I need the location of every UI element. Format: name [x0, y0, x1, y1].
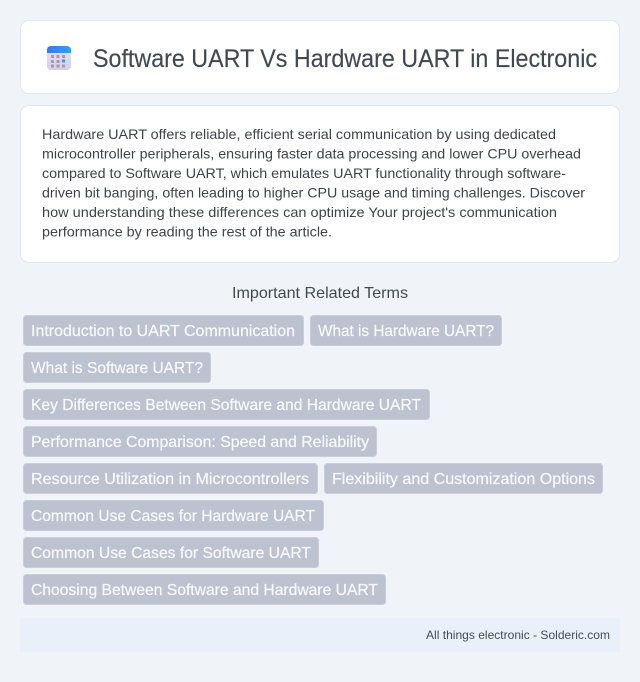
panel: summary paragraph: Hardware UART offers reliable, efficient serial communication by using dedicated: [42, 126, 556, 142]
chip: key differences: Key Differences Between Software and Hardware UART: [31, 397, 421, 414]
panel: summary paragraph: compared to Software UART, which emulates UART functionality through software-: [42, 165, 566, 181]
chip: introduction: Introduction to UART Communication: [31, 323, 295, 340]
chip: what is software uart: [24, 352, 210, 382]
title: Software UART Vs Hardware UART in Electronic: [93, 45, 597, 73]
chip: choosing between: [24, 574, 386, 604]
panel: summary paragraph: microcontroller peripherals, ensuring faster data processing and lower CPU overhead: [42, 146, 581, 162]
chip: use cases software: [24, 538, 318, 568]
chip: what is software uart: What is Software UART?: [31, 360, 203, 377]
chip: what is hardware uart: What is Hardware UART?: [318, 323, 494, 340]
chip: performance comparison: [24, 426, 376, 456]
panel: summary paragraph: [20, 106, 620, 262]
heading: important related terms: Important Related Terms: [232, 285, 408, 302]
footer: All things electronic - Solderic.com: [426, 628, 610, 642]
icon: calendar grid: [47, 46, 71, 70]
panel: summary paragraph: performance by reading the rest of the article.: [42, 224, 332, 240]
chip: use cases hardware: [24, 500, 324, 530]
chip: resource utilization: [24, 464, 318, 494]
chip: key differences: [24, 390, 430, 420]
panel: summary paragraph: driven bit banging, often leading to higher CPU usage and timing challenges. Discover: [42, 184, 585, 200]
chip: choosing between: Choosing Between Software and Hardware UART: [31, 582, 378, 599]
chip: resource utilization: Resource Utilization in Microcontrollers: [31, 471, 309, 488]
panel: related term chips: [24, 316, 602, 604]
panel: summary paragraph: how understanding these differences can optimize Your project's communication: [42, 204, 557, 220]
chip: what is hardware uart: [310, 316, 502, 346]
chip: introduction: [24, 316, 304, 346]
chip: flexibility: [324, 464, 602, 494]
chip: use cases software: Common Use Cases for Software UART: [31, 545, 311, 562]
chip: use cases hardware: Common Use Cases for Hardware UART: [31, 508, 315, 525]
chip: flexibility: Flexibility and Customization Options: [332, 471, 595, 488]
footer: [20, 618, 620, 652]
chip: performance comparison: Performance Comparison: Speed and Reliability: [31, 434, 369, 451]
panel: header: [20, 20, 620, 94]
